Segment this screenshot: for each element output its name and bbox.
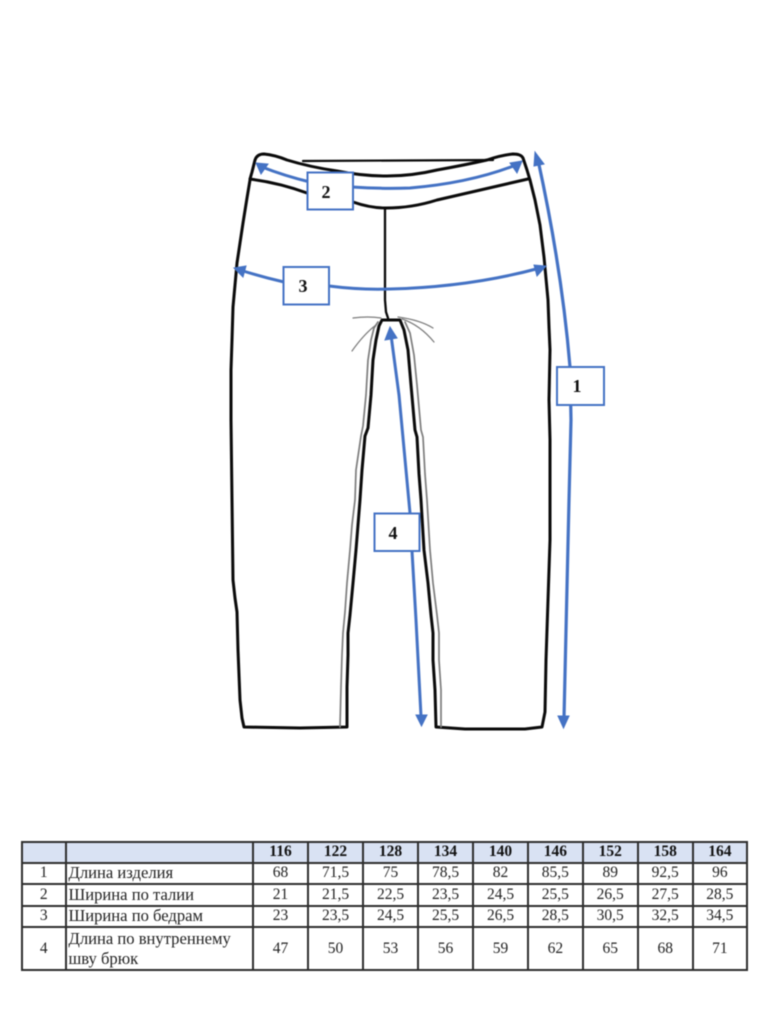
- size table: Длина по внутреннему: [68, 928, 231, 948]
- size table: 24,5: [487, 886, 514, 903]
- size table: 92,5: [652, 864, 679, 881]
- size table: 1: [40, 864, 48, 881]
- size table: 89: [602, 864, 618, 881]
- size table: 164: [708, 843, 731, 860]
- label box 2: [308, 172, 353, 210]
- label box 4: 4: [388, 523, 398, 543]
- label box 3: [284, 267, 329, 304]
- size table: 23: [273, 907, 288, 924]
- size table: 2: [40, 886, 48, 903]
- size table: 28,5: [542, 907, 569, 924]
- size table: 21,5: [322, 886, 349, 903]
- size table: 75: [383, 864, 398, 881]
- size table: 23,5: [322, 907, 349, 924]
- size table: 96: [712, 864, 728, 881]
- label box 1: 1: [572, 376, 582, 396]
- size table: 116: [269, 843, 292, 860]
- size table: 30,5: [597, 907, 624, 924]
- size table: 62: [548, 940, 563, 956]
- size table: 59: [493, 940, 508, 956]
- size table: 34,5: [706, 907, 733, 924]
- size table: шву брюк: [68, 948, 138, 968]
- size table: 4: [40, 940, 48, 956]
- size table: Длина изделия: [68, 863, 173, 882]
- size table: 25,5: [542, 886, 569, 903]
- size table: 82: [493, 864, 508, 881]
- pants outline: [231, 154, 550, 729]
- size table: 65: [602, 940, 618, 956]
- size table: 71: [712, 940, 728, 956]
- size table: 23,5: [432, 886, 459, 903]
- size table: 21: [273, 886, 288, 903]
- size table: 27,5: [652, 886, 679, 903]
- size table: 26,5: [597, 886, 624, 903]
- size table: 32,5: [652, 907, 679, 924]
- size table: 68: [657, 940, 673, 956]
- size table: 158: [654, 843, 677, 860]
- size table: 78,5: [432, 864, 459, 881]
- size table: Ширина по талии: [68, 885, 194, 904]
- arrow 3: hip width: [234, 265, 546, 289]
- label box 3: 3: [298, 276, 308, 296]
- size table: 71,5: [322, 864, 349, 881]
- size table: 53: [383, 940, 398, 956]
- size table: 122: [324, 843, 347, 860]
- label box 4: [374, 514, 420, 551]
- size table: 22,5: [377, 886, 404, 903]
- size table: 152: [599, 843, 622, 860]
- size table: 50: [328, 940, 343, 956]
- label box 2: 2: [322, 182, 330, 202]
- size table: 25,5: [432, 907, 459, 924]
- size table: 68: [273, 864, 288, 881]
- size table: 128: [379, 843, 402, 860]
- size table: Ширина по бедрам: [68, 906, 203, 925]
- size table: 47: [273, 940, 288, 956]
- arrow 1: product length: [534, 152, 571, 728]
- size table: 3: [40, 907, 48, 924]
- size table: 56: [438, 940, 453, 956]
- size table: [20, 840, 749, 972]
- size table: 146: [544, 843, 567, 860]
- size table: 140: [489, 843, 512, 860]
- arrow 4: inseam length: [385, 327, 427, 726]
- inner seam stitching: [340, 317, 441, 727]
- size table: 26,5: [487, 907, 514, 924]
- size table: 24,5: [377, 907, 404, 924]
- size table: 85,5: [542, 864, 569, 881]
- size table: 28,5: [706, 886, 733, 903]
- arrow 2: waist width: [256, 161, 522, 188]
- size table: 134: [434, 843, 457, 860]
- label box 1: [557, 367, 604, 405]
